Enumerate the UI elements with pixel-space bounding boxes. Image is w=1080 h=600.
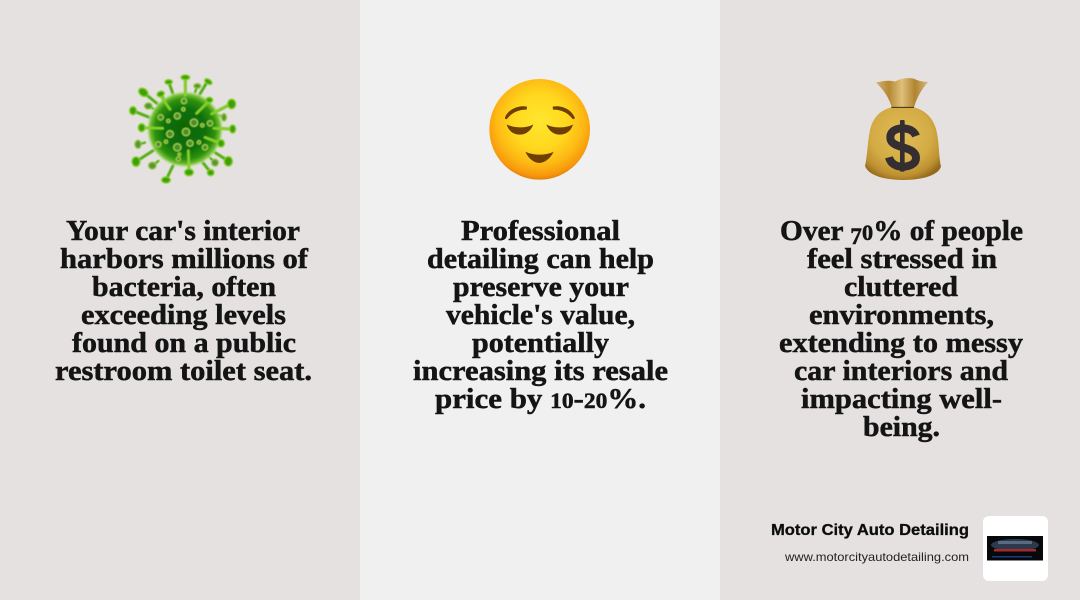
text: clutter stress fact: cluttered xyxy=(844,271,958,303)
text: resale value fact: price by 10-20%. xyxy=(435,383,646,415)
text: clutter stress fact: car interiors and xyxy=(794,355,1008,387)
text: clutter stress fact: impacting well- xyxy=(801,383,1002,415)
text: bacteria fact: exceeding levels xyxy=(81,299,286,331)
brand: Motor City Auto Detailing footer xyxy=(771,516,1048,581)
text: clutter stress fact: 0 xyxy=(862,220,873,245)
text: clutter stress fact: % of people xyxy=(873,215,1021,247)
text: clutter stress fact: extending to messy xyxy=(779,327,1024,359)
panel: bacteria xyxy=(0,0,360,600)
text: resale value fact: Professional xyxy=(461,215,620,247)
text: resale value fact xyxy=(413,215,668,415)
text: bacteria fact: Your car's interior xyxy=(66,215,300,247)
text: clutter stress fact xyxy=(779,215,1024,443)
panel: clutter stress xyxy=(720,0,1080,600)
text: clutter stress fact: being. xyxy=(863,411,940,443)
text: clutter stress fact: Over xyxy=(780,215,842,247)
text: bacteria fact: found on a public xyxy=(72,327,296,359)
text: bacteria fact: bacteria, often xyxy=(92,271,276,303)
icon: relieved face emoji xyxy=(489,79,590,180)
text: clutter stress fact: environments, xyxy=(809,299,994,331)
text: clutter stress fact: feel stressed in xyxy=(807,243,997,275)
brand name: Motor City Auto Detailing xyxy=(771,522,969,539)
logo tile xyxy=(983,516,1048,581)
text: bacteria fact: restroom toilet seat. xyxy=(55,355,312,387)
website URL: www.motorcityautodetailing.com xyxy=(784,550,969,564)
text: resale value fact: detailing can help xyxy=(427,243,654,275)
icon: green bacteria xyxy=(130,75,236,183)
text: resale value fact: increasing its resale xyxy=(413,355,668,387)
panel: resale value xyxy=(360,0,720,600)
text: bacteria fact xyxy=(55,215,312,387)
icon: money bag emoji xyxy=(865,78,941,180)
text: resale value fact: vehicle's value, xyxy=(446,299,635,331)
text: clutter stress fact: 7 xyxy=(850,224,862,249)
text: resale value fact: potentially xyxy=(472,327,610,359)
text: resale value fact: preserve your xyxy=(453,271,629,303)
text: bacteria fact: harbors millions of xyxy=(60,243,308,275)
icon: dollar sign xyxy=(889,120,916,172)
